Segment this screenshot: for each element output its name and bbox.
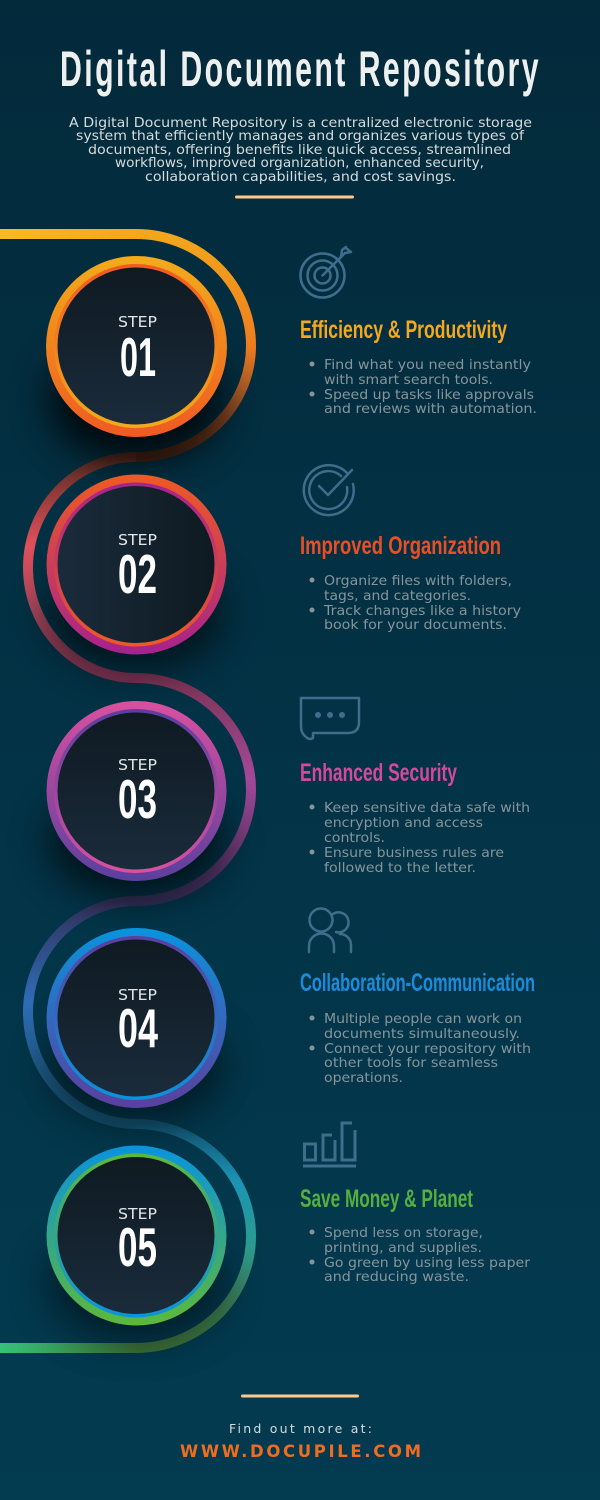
bullet list: controls. [324,831,385,846]
bullet list: book for your documents. [324,618,507,633]
bullet list: Multiple people can work on [324,1012,522,1027]
intro paragraph: workflows, improved organization, enhanced security, [115,156,484,171]
intro paragraph [69,116,532,185]
heading: Efficiency & Productivity [300,316,507,344]
icon: speech bubble [301,698,359,739]
panel: save money and planet [300,1123,531,1285]
bullet list: printing, and supplies. [324,1241,482,1256]
bullet list: tags, and categories. [324,589,471,604]
bullet list: Ensure business rules are [324,846,504,861]
intro paragraph: system that efficiently manages and organizes various types of [76,129,524,144]
heading: Enhanced Security [300,759,457,787]
bullet list: Keep sensitive data safe with [324,801,530,816]
step 3 badge: 03 [118,768,157,830]
bullet list: Find what you need instantly [324,358,531,373]
step 4 badge: 04 [118,997,158,1059]
footer website link: WWW.DOCUPILE.COM [180,1442,421,1461]
step 3 badge: STEP [118,756,157,774]
step 5 badge: STEP [118,1205,157,1223]
bullet list: encryption and access [324,816,483,831]
intro paragraph: A Digital Document Repository is a centralized electronic storage [69,116,532,131]
intro paragraph: collaboration capabilities, and cost savings. [145,170,456,185]
panel: improved organization [300,465,521,633]
step 1 badge [46,256,227,462]
bullet list: followed to the letter. [324,861,476,876]
bullet list: and reviews with automation. [324,402,537,417]
step 1 badge: 01 [120,326,156,388]
panel: enhanced security [300,698,530,876]
bullet list: with smart search tools. [324,373,493,388]
winding path [0,234,251,1348]
top divider [235,196,354,198]
bullet list: documents simultaneously. [324,1027,520,1042]
icon: bar chart [303,1123,356,1166]
step 4 badge: STEP [118,986,157,1004]
footer call to action: Find out more at: [229,1421,372,1436]
bullet list: Go green by using less paper [324,1256,531,1271]
bullet list: Organize files with folders, [324,574,512,589]
step 5 badge [46,1146,226,1340]
bullet list: Track changes like a history [323,604,521,619]
bullet list: other tools for seamless [324,1056,498,1071]
panel: efficiency and productivity [300,247,537,417]
heading: Improved Organization [300,532,501,560]
step 5 badge: 05 [118,1216,157,1278]
bullet list: and reducing waste. [324,1270,469,1285]
bottom divider [241,1394,359,1398]
step 4 badge [46,928,226,1123]
bullet list [310,801,530,876]
icon: target with arrow [300,247,351,298]
bullet list: Speed up tasks like approvals [324,388,534,403]
icon: check mark in circle [304,465,354,515]
step 2 badge: STEP [118,531,157,549]
panel: collaboration and communication [300,908,535,1086]
bullet list [310,574,521,633]
heading: Save Money & Planet [300,1185,473,1213]
step 3 badge [46,701,226,897]
bullet list: Spend less on storage, [324,1226,483,1241]
bullet list: operations. [324,1071,403,1086]
step 2 badge: 02 [118,543,157,605]
bullet list [310,1012,531,1086]
bullet list: Connect your repository with [324,1042,531,1057]
bullet list [310,1226,531,1285]
bullet list [310,358,537,417]
step 1 badge: STEP [118,313,157,331]
step 2 badge [46,474,226,670]
icon: two people [309,908,351,952]
intro paragraph: documents, offering benefits like quick access, streamlined [88,143,511,158]
